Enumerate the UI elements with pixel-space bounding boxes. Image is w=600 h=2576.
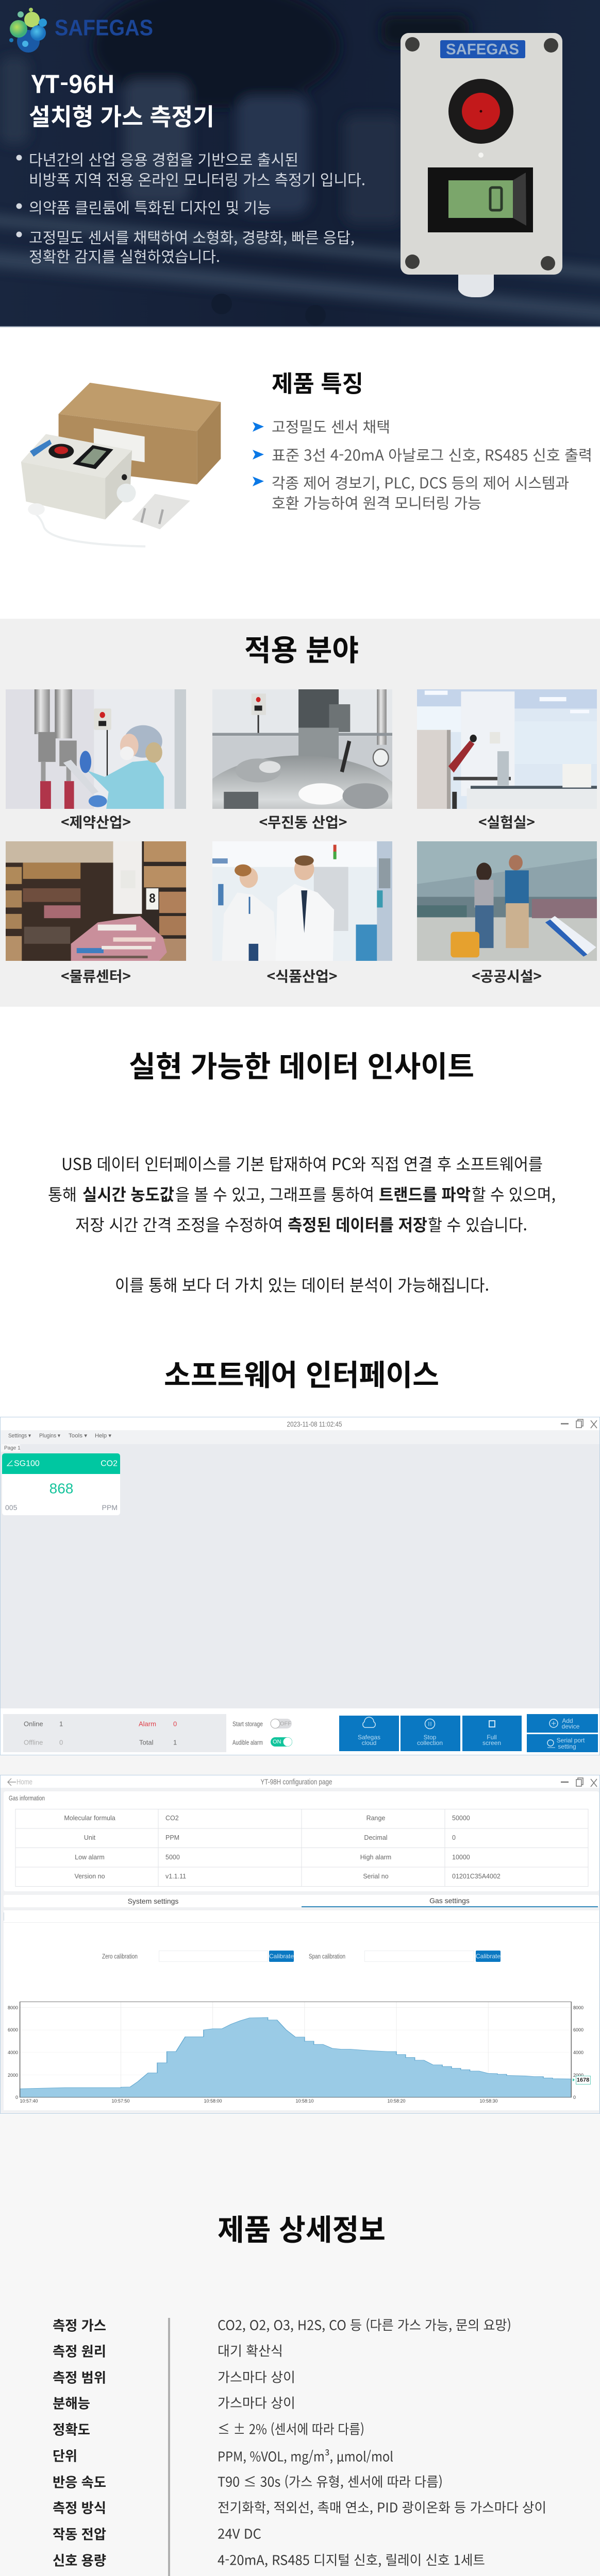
text block: data insight description: 할 수 있으며, xyxy=(472,1182,556,1206)
icon: SAFEGAS logo mark xyxy=(9,8,47,53)
chart: gas concentration over time: 0 xyxy=(573,2095,576,2100)
toggle: start storage off xyxy=(232,1719,292,1728)
spec list: PPM, %VOL, mg/m³, μmol/mol xyxy=(218,2446,393,2466)
toggle: start storage off: Start storage xyxy=(232,1720,263,1728)
gas information table xyxy=(4,1791,599,1891)
heading: software interface: 소프트웨어 인터페이스 xyxy=(164,1352,439,1394)
tabs: System settings xyxy=(128,1897,178,1905)
caption row 1: <무진동 산업> xyxy=(259,811,347,832)
tab: page 1: Page 1 xyxy=(4,1446,21,1451)
chart: gas concentration over time: 2000 xyxy=(8,2073,18,2078)
status bar: 0 xyxy=(59,1738,63,1747)
hero background: blurred production line xyxy=(0,0,600,327)
spec list: 작동 전압 xyxy=(53,2523,106,2543)
panel: product features xyxy=(21,365,592,547)
panel: application fields xyxy=(0,619,600,1007)
chart: gas concentration over time: 8000 xyxy=(573,2005,584,2010)
settings panel: Zero calibration xyxy=(102,1953,138,1960)
spec list: 정확도 xyxy=(53,2418,90,2439)
spec list: 24V DC xyxy=(218,2523,261,2543)
text block: data insight description: USB 데이터 인터페이스를 기본 탑재하여 PC와 직접 연결 후 소프트웨어를 xyxy=(61,1151,543,1175)
gas information table: High alarm xyxy=(360,1854,391,1861)
gas information table: Serial no xyxy=(363,1873,389,1880)
panel: software configuration window xyxy=(0,1775,600,2113)
gas information table: Range xyxy=(366,1815,385,1822)
settings panel: Calibrate xyxy=(476,1953,501,1960)
product photo: wall-mounted detector xyxy=(401,33,562,297)
tabs xyxy=(4,1895,599,1907)
gas information table: Molecular formula xyxy=(64,1815,115,1822)
heading: product features: 제품 특징 xyxy=(272,365,363,399)
text block: data insight description: 실시간 농도값 xyxy=(82,1182,174,1206)
text block: hero bullets: 다년간의 산업 응용 경험을 기반으로 출시된 xyxy=(29,148,298,170)
list: product features: 표준 3선 4-20mA 아날로그 신호, RS485 신호 출력 xyxy=(272,444,592,465)
text block: data insight description xyxy=(48,1151,556,1296)
gas information table: 50000 xyxy=(452,1815,470,1822)
spec list: 가스마다 상이 xyxy=(218,2367,295,2386)
button: add device xyxy=(527,1714,598,1733)
text block: data insight description: 이를 통해 보다 더 가치 있는 데이터 분석이 가능해집니다. xyxy=(115,1273,489,1296)
text block: data insight description: 저장 시간 간격 조정을 수정하여 xyxy=(75,1212,283,1236)
title bar: YT-98H configuration page xyxy=(261,1777,332,1787)
text block: hero bullets: 고정밀도 센서를 채택하여 소형화, 경량화, 빠른 응답, xyxy=(29,226,355,248)
card: SG100 CO2 reading: 868 xyxy=(49,1481,73,1496)
gas information table: 10000 xyxy=(452,1854,470,1861)
text block: data insight description: 트랜드를 파악 xyxy=(379,1182,471,1206)
icon: window controls xyxy=(561,1419,597,1428)
button: serial port setting: setting xyxy=(558,1743,576,1750)
toggle: start storage off: OFF xyxy=(280,1721,291,1727)
button: full screen: screen xyxy=(482,1739,501,1747)
chart: gas concentration over time: 10:57:40 xyxy=(20,2098,38,2104)
logo wordmark: SAFEGAS xyxy=(55,15,153,40)
toggle: audible alarm on: ON xyxy=(273,1739,281,1745)
card: SG100 CO2 reading xyxy=(2,1453,120,1515)
divider between labels and values xyxy=(168,2318,170,2576)
button: add device: device xyxy=(562,1723,580,1730)
status bar: Total xyxy=(139,1738,154,1747)
tab: page 1 xyxy=(1,1444,21,1452)
chart: gas concentration over time: 2000 xyxy=(573,2073,584,2078)
caption row 2: <물류센터> xyxy=(61,965,131,986)
gas information table: CO2 xyxy=(165,1815,179,1822)
spec list: 대기 확산식 xyxy=(218,2341,283,2360)
title bar: Home xyxy=(16,1777,32,1787)
menu bar: Settings ▾ xyxy=(8,1433,31,1439)
bottom edge xyxy=(0,326,600,327)
window title date: 2023-11-08 11:02:45 xyxy=(287,1420,342,1428)
status bar: 1 xyxy=(173,1738,177,1747)
chart: gas concentration over time: 10:58:00 xyxy=(204,2098,222,2104)
title: model: YT-96H xyxy=(31,65,115,100)
spec list: ≤ ± 2% (센서에 따라 다름) xyxy=(218,2419,364,2438)
text block: data insight description: 측정된 데이터를 저장 xyxy=(288,1212,427,1236)
gas information table: Unit xyxy=(84,1834,96,1841)
chart: gas concentration over time: 4000 xyxy=(8,2050,18,2055)
photo: logistics center xyxy=(6,841,186,961)
gas information table: Decimal xyxy=(364,1834,388,1841)
chart: gas concentration over time: 10:57:50 xyxy=(111,2098,130,2104)
caption row 2 xyxy=(61,965,542,986)
button: stop collection xyxy=(401,1716,460,1751)
status bar xyxy=(3,1714,226,1752)
menu bar xyxy=(1,1430,599,1444)
text block: hero bullets: 의약품 클린룸에 특화된 디자인 및 기능 xyxy=(29,196,271,218)
caption row 1 xyxy=(61,811,535,832)
spec list: CO2, O2, O3, H2S, CO 등 (다른 가스 가능, 문의 요망) xyxy=(218,2315,511,2334)
status bar: Online xyxy=(24,1720,43,1728)
chart: gas concentration over time: 10:58:10 xyxy=(295,2098,314,2104)
gas information table: 5000 xyxy=(165,1854,180,1861)
button: add device: Add xyxy=(562,1717,573,1724)
text block: data insight description: 을 볼 수 있고, 그래프를 통하여 xyxy=(175,1182,374,1206)
panel: hero banner xyxy=(0,0,600,327)
band behind software screenshots xyxy=(0,1755,600,1775)
card: SG100 CO2 reading: ∠SG100 xyxy=(6,1459,40,1468)
gas information table: Low alarm xyxy=(75,1854,105,1861)
spec list: 측정 원리 xyxy=(53,2340,106,2361)
button: serial port setting: Serial port xyxy=(557,1737,585,1744)
device workspace xyxy=(1,1444,599,1708)
panel: software main window xyxy=(0,1417,600,1755)
menu bar: Plugins ▾ xyxy=(39,1433,60,1439)
photo: pharmaceutical xyxy=(6,689,186,809)
chart: gas concentration over time: 0 xyxy=(15,2095,18,2100)
text block: data insight description: 할 수 있습니다. xyxy=(428,1212,527,1236)
toggle: audible alarm on xyxy=(232,1737,292,1747)
photo: food industry xyxy=(212,841,392,961)
chart: gas concentration over time: 1678 xyxy=(577,2077,589,2083)
heading: product details: 제품 상세정보 xyxy=(218,2207,386,2249)
spec list: 반응 속도 xyxy=(53,2471,106,2492)
text block: data insight description: 통해 xyxy=(48,1182,77,1206)
button: stop collection: collection xyxy=(417,1739,443,1747)
status bar: 0 xyxy=(173,1720,177,1728)
list: product features xyxy=(253,415,592,513)
list: product features: 고정밀도 센서 채택 xyxy=(272,415,390,437)
heading: actionable data insight: 실현 가능한 데이터 인사이트 xyxy=(129,1043,474,1086)
gas information table: PPM xyxy=(165,1834,179,1841)
button: full screen xyxy=(462,1716,522,1751)
photo: public facilities xyxy=(417,841,597,961)
menu bar: Help ▾ xyxy=(95,1433,111,1439)
photo: laboratory xyxy=(417,689,597,809)
toggle: audible alarm on: Audible alarm xyxy=(232,1738,263,1747)
heading: application fields: 적용 분야 xyxy=(244,627,359,669)
caption row 1: <제약산업> xyxy=(61,811,131,832)
settings panel: Calibrate xyxy=(269,1953,294,1960)
card: SG100 CO2 reading: 005 xyxy=(5,1503,18,1512)
button: stop collection: Stop xyxy=(424,1734,437,1741)
panel: product specifications xyxy=(0,2114,600,2576)
spec list: 측정 가스 xyxy=(53,2314,106,2335)
gas information table: 01201C35A4002 xyxy=(452,1873,501,1880)
button: Safegas cloud: cloud xyxy=(362,1739,376,1747)
button: Safegas cloud xyxy=(339,1716,399,1751)
tabs: Gas settings xyxy=(429,1896,470,1905)
gas information table: Version no xyxy=(74,1873,105,1880)
spec list: 측정 범위 xyxy=(53,2367,106,2386)
status bar: Alarm xyxy=(139,1720,156,1728)
card: SG100 CO2 reading: PPM xyxy=(102,1503,118,1512)
spec list: 전기화학, 적외선, 촉매 연소, PID 광이온화 등 가스마다 상이 xyxy=(218,2498,546,2516)
gas information table: v1.1.11 xyxy=(165,1873,186,1880)
caption row 2: <공공시설> xyxy=(472,965,542,986)
settings panel: Span calibration xyxy=(309,1953,345,1960)
spec list xyxy=(53,2314,546,2576)
text block: hero bullets: 정확한 감지를 실현하였습니다. xyxy=(29,245,220,267)
list: product features: 각종 제어 경보기, PLC, DCS 등의 제어 시스템과 xyxy=(272,471,569,493)
chart: gas concentration over time: 6000 xyxy=(573,2027,584,2032)
spec list: 4-20mA, RS485 디지털 신호, 릴레이 신호 1세트 xyxy=(218,2550,485,2569)
status bar: Offline xyxy=(24,1738,43,1747)
spec list: 단위 xyxy=(53,2445,77,2465)
button: Safegas cloud: Safegas xyxy=(358,1734,380,1741)
chart: gas concentration over time: 8000 xyxy=(8,2005,18,2010)
caption row 2: <식품산업> xyxy=(267,965,337,986)
status bar: 1 xyxy=(59,1720,63,1728)
product photo: boxed detector kit xyxy=(21,383,221,547)
gas information table: 0 xyxy=(452,1834,456,1841)
photo: logistics center: 8 xyxy=(149,892,156,906)
title: product name: 설치형 가스 측정기 xyxy=(29,98,214,132)
text block: hero bullets: 비방폭 지역 전용 온라인 모니터링 가스 측정기 입니다. xyxy=(29,168,365,190)
chart: gas concentration over time: 6000 xyxy=(8,2027,18,2032)
settings panel xyxy=(4,1910,599,2110)
spec list: 분해능 xyxy=(53,2393,90,2412)
photo: cleanroom industry xyxy=(212,689,392,809)
spec list: 가스마다 상이 xyxy=(218,2393,295,2412)
chart: gas concentration over time xyxy=(8,2002,591,2104)
title bar xyxy=(1,1775,599,1788)
chart: gas concentration over time: 10:58:20 xyxy=(387,2098,406,2104)
spec list: 측정 방식 xyxy=(53,2497,106,2517)
caption row 1: <실험실> xyxy=(478,811,535,832)
spec list: T90 ≤ 30s (가스 유형, 센서에 따라 다름) xyxy=(218,2472,443,2490)
menu bar: Tools ▾ xyxy=(69,1433,87,1439)
button: serial port setting xyxy=(527,1734,598,1752)
chart: gas concentration over time: 4000 xyxy=(573,2050,584,2055)
button: full screen: Full xyxy=(487,1734,497,1741)
gas information table: Gas information xyxy=(9,1794,45,1802)
product photo: wall-mounted detector: SAFEGAS xyxy=(446,41,519,58)
list: product features: 호환 가능하여 원격 모니터링 가능 xyxy=(272,492,481,513)
chart: gas concentration over time: 10:58:30 xyxy=(479,2098,498,2104)
spec list: 신호 용량 xyxy=(53,2549,106,2570)
card: SG100 CO2 reading: CO2 xyxy=(101,1459,118,1468)
text block: hero bullets xyxy=(16,148,365,267)
